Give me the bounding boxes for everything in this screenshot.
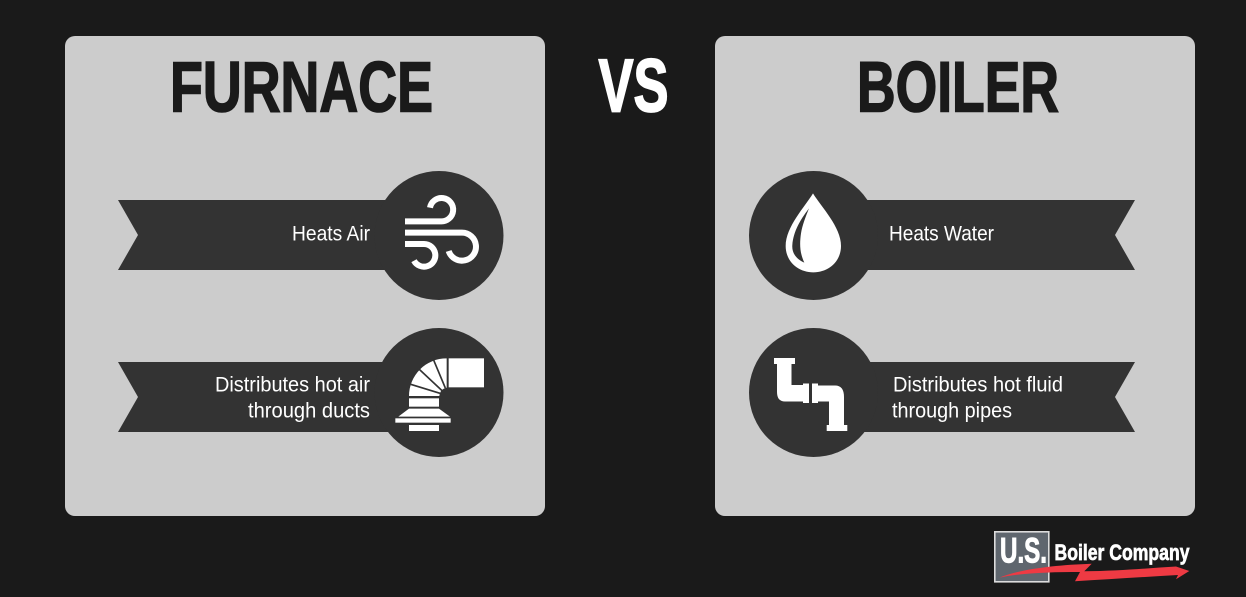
heading: boiler: BOILER [857,48,1059,128]
label: distributes hot fluid: Distributes hot fluid [893,372,1063,396]
logo swoosh [999,564,1189,581]
ribbon: heats water [749,171,1135,300]
label: distributes hot air: through ducts [248,398,370,422]
heading: furnace: FURNACE [170,48,433,128]
label: heats air: Heats Air [292,222,370,246]
logo: U.S. Boiler Company [995,531,1190,582]
panel: boiler [715,36,1195,516]
logo text: Boiler Company: Boiler Company [1054,540,1190,565]
ribbon: distributes hot fluid [749,328,1135,457]
panel: furnace [65,36,545,516]
logo text: U.S.: U.S. [1000,531,1047,570]
label: distributes hot air: Distributes hot air [215,372,370,396]
icon: water drop [786,193,841,272]
label: distributes hot fluid: through pipes [892,398,1012,422]
heading: vs: VS [598,44,668,128]
ribbon: distributes hot air [118,328,504,457]
icon: pipes [774,358,847,431]
label: heats water: Heats Water [889,222,994,246]
icon: duct [395,358,484,431]
ribbon: heats air [118,171,504,300]
icon: wind [405,198,476,267]
